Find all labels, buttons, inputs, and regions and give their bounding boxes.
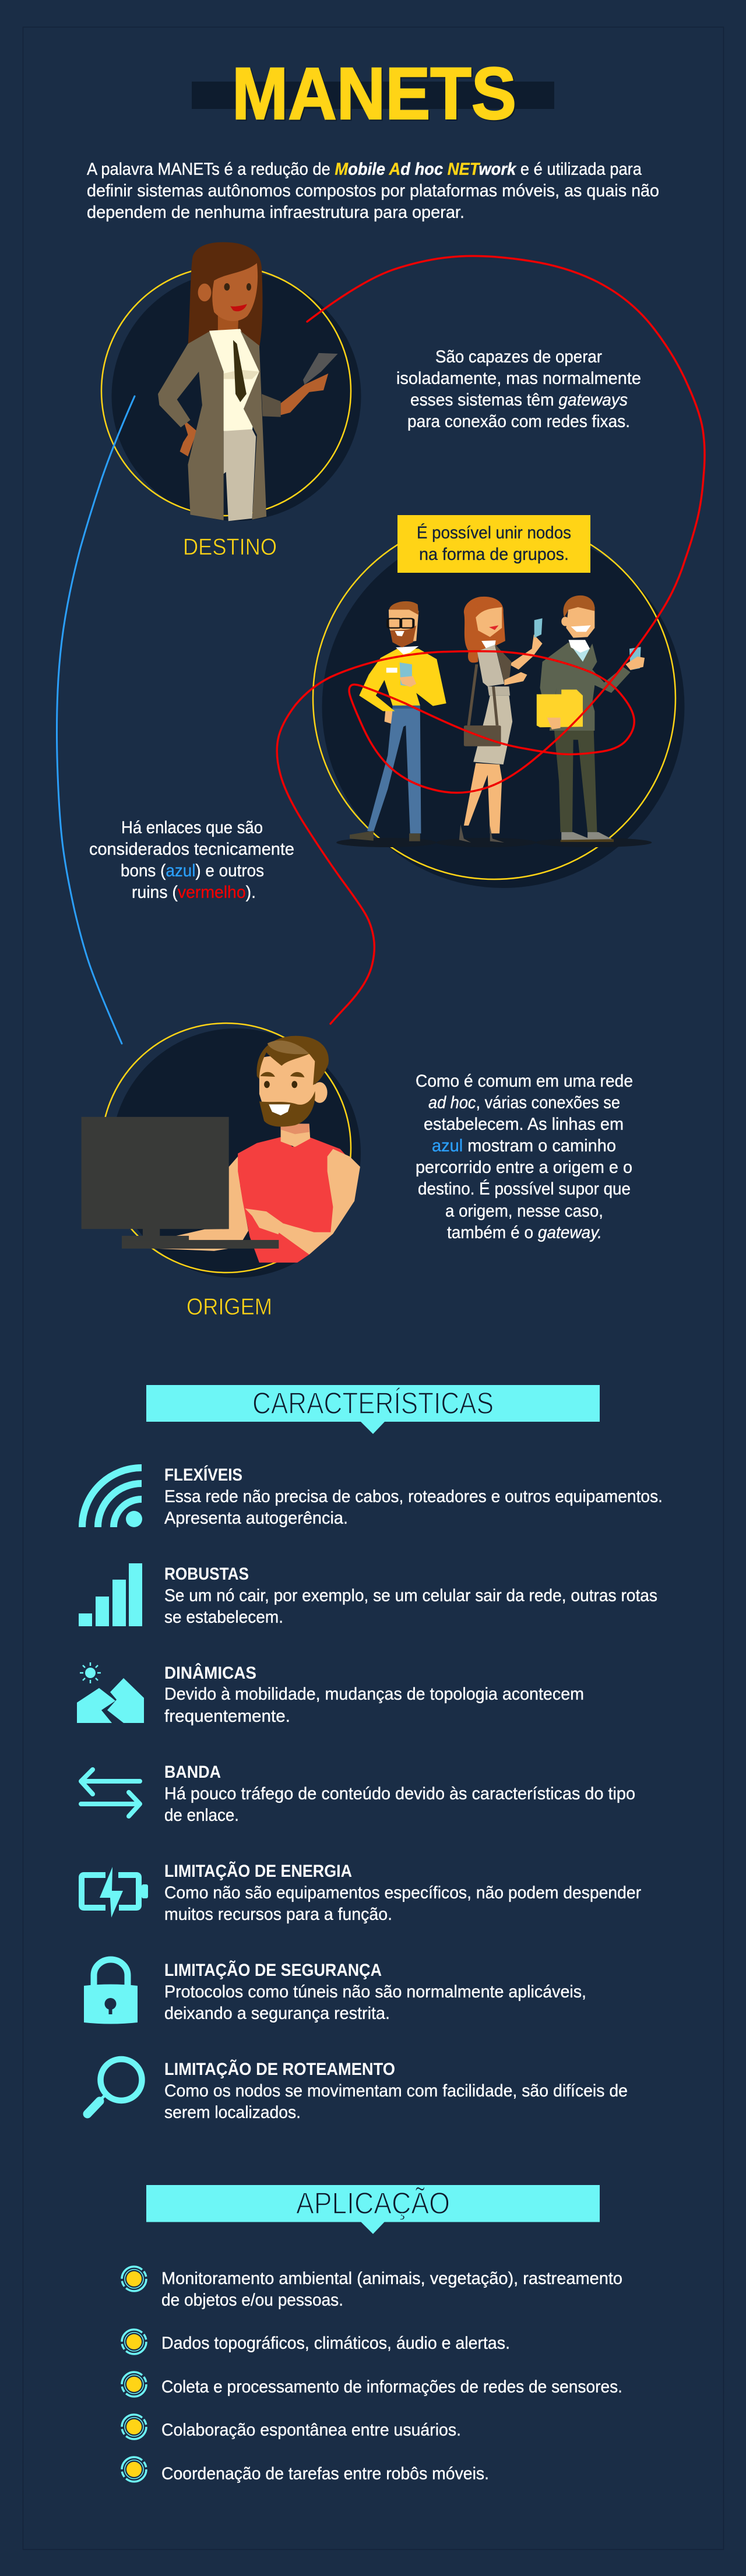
label: origem: ORIGEM [186, 1294, 272, 1320]
bullet text 1: de objetos e/ou pessoas. [161, 2290, 343, 2310]
man with glasses [350, 601, 446, 841]
icon: battery [82, 1867, 148, 1918]
bullet icon 4 [122, 2415, 146, 2439]
item: robustas: ROBUSTAS [164, 1564, 249, 1584]
text: paths explanation: ad hoc, várias conexões se [428, 1093, 620, 1112]
item: limitação de roteamento: LIMITAÇÃO DE ROTEAMENTO [164, 2059, 395, 2079]
bullet icon 1 [122, 2267, 146, 2291]
text: paths explanation: estabelecem. As linhas em [424, 1115, 624, 1134]
item: limitação de segurança: Protocolos como túneis não são normalmente aplicáveis, [164, 1982, 586, 2001]
callout: group nodes [397, 515, 590, 573]
man with folder [537, 595, 645, 842]
item: flexíveis: Apresenta autogerência. [164, 1509, 348, 1528]
item: flexíveis: FLEXÍVEIS [164, 1465, 242, 1485]
item: limitação de segurança: deixando a segurança restrita. [164, 2004, 390, 2023]
bullet text 1 [161, 2269, 622, 2310]
icon: sun and mountains [77, 1662, 144, 1723]
bullet icon 5 [122, 2457, 146, 2482]
text: operate in isolation [396, 347, 641, 431]
text: paths explanation: também é o gateway. [447, 1223, 602, 1242]
link: blue path [57, 396, 135, 1044]
item: banda: Há pouco tráfego de conteúdo devido às características do tipo [164, 1784, 635, 1803]
intro text: definir sistemas autônomos compostos por plataformas móveis, as quais não [87, 181, 659, 200]
item: robustas [164, 1564, 657, 1627]
item: dinâmicas: frequentemente. [164, 1707, 290, 1726]
bullet text 1: Monitoramento ambiental (animais, vegetação), rastreamento [161, 2269, 622, 2288]
item: banda: BANDA [164, 1763, 221, 1782]
banner: características [146, 1385, 600, 1434]
illustration: woman with phone [158, 242, 338, 521]
text: paths explanation: destino. É possível supor que [418, 1179, 631, 1199]
intro text [87, 160, 659, 222]
icon: arrows [81, 1770, 140, 1816]
text: good and bad links: bons (azul) e outros [121, 861, 264, 880]
item: robustas: se estabelecem. [164, 1608, 283, 1627]
bullet text 2: Dados topográficos, climáticos, áudio e alertas. [161, 2334, 510, 2353]
callout: group nodes: É possível unir nodos [417, 523, 571, 542]
item: limitação de roteamento [164, 2059, 628, 2122]
text: paths explanation [416, 1072, 633, 1242]
list: applications [122, 2267, 622, 2483]
item: limitação de energia: Como não são equipamentos específicos, não podem despender [164, 1883, 641, 1902]
item: limitação de energia: LIMITAÇÃO DE ENERGIA [164, 1861, 352, 1881]
bullet text 3: Coleta e processamento de informações de redes de sensores. [161, 2377, 622, 2397]
bullet text 5: Coordenação de tarefas entre robôs móveis. [161, 2464, 489, 2483]
text: operate in isolation: isoladamente, mas normalmente [396, 369, 641, 388]
bullet icon 2 [122, 2330, 146, 2354]
text: operate in isolation: esses sistemas têm gateways [410, 390, 628, 410]
callout: group nodes: na forma de grupos. [419, 545, 569, 564]
item: banda [164, 1763, 635, 1825]
panel: destino circle with woman [101, 242, 361, 521]
text: paths explanation: Como é comum em uma rede [416, 1072, 633, 1091]
panel: origem circle with man at computer [82, 1023, 361, 1278]
text: good and bad links [89, 818, 294, 902]
label: destino: DESTINO [183, 534, 277, 560]
icon: signal bars [79, 1563, 142, 1626]
text: good and bad links: ruins (vermelho). [132, 883, 256, 902]
item: dinâmicas: Devido à mobilidade, mudanças de topologia acontecem [164, 1685, 584, 1704]
panel: group circle with three people [313, 517, 684, 888]
item: limitação de energia: muitos recursos para a função. [164, 1905, 392, 1924]
item: dinâmicas [164, 1663, 584, 1726]
text: good and bad links: considerados tecnicamente [89, 840, 294, 859]
text: paths explanation: a origem, nesse caso, [445, 1201, 603, 1221]
banner: aplicação: APLICAÇÃO [296, 2187, 450, 2221]
icon: wifi [82, 1468, 142, 1527]
link: red path [277, 256, 705, 1024]
item: flexíveis [164, 1465, 663, 1528]
illustration: three people with phones [336, 595, 652, 847]
item: robustas: Se um nó cair, por exemplo, se um celular sair da rede, outras rotas [164, 1586, 657, 1605]
title: MANETS [232, 52, 516, 135]
item: limitação de roteamento: Como os nodos se movimentam com facilidade, são difíceis de [164, 2081, 628, 2101]
bullet text 4: Colaboração espontânea entre usuários. [161, 2420, 461, 2440]
computer monitor [82, 1117, 279, 1249]
intro text: dependem de nenhuma infraestrutura para operar. [87, 203, 465, 222]
item: limitação de segurança [164, 1960, 586, 2023]
illustration: man at computer [82, 1036, 360, 1263]
banner: aplicação [146, 2185, 600, 2234]
banner: características: CARACTERÍSTICAS [252, 1387, 494, 1421]
text: operate in isolation: São capazes de operar [435, 347, 602, 367]
item: limitação de segurança: LIMITAÇÃO DE SEGURANÇA [164, 1960, 382, 1980]
text: paths explanation: percorrido entre a origem e o [416, 1158, 632, 1177]
bullet icon 3 [122, 2372, 146, 2397]
text: good and bad links: Há enlaces que são [121, 818, 263, 837]
item: dinâmicas: DINÂMICAS [164, 1663, 256, 1683]
intro text: A palavra MANETs é a redução de Mobile Ad hoc NETwork e é utilizada para [87, 160, 642, 179]
item: limitação de energia [164, 1861, 641, 1924]
item: banda: de enlace. [164, 1806, 239, 1825]
icon: magnifier [87, 2059, 142, 2114]
text: operate in isolation: para conexão com redes fixas. [407, 412, 630, 431]
woman with handbag [459, 597, 543, 843]
item: flexíveis: Essa rede não precisa de cabos, roteadores e outros equipamentos. [164, 1487, 663, 1506]
icon: lock [84, 1960, 138, 2024]
text: paths explanation: azul mostram o caminho [432, 1136, 616, 1155]
item: limitação de roteamento: serem localizados. [164, 2103, 301, 2122]
